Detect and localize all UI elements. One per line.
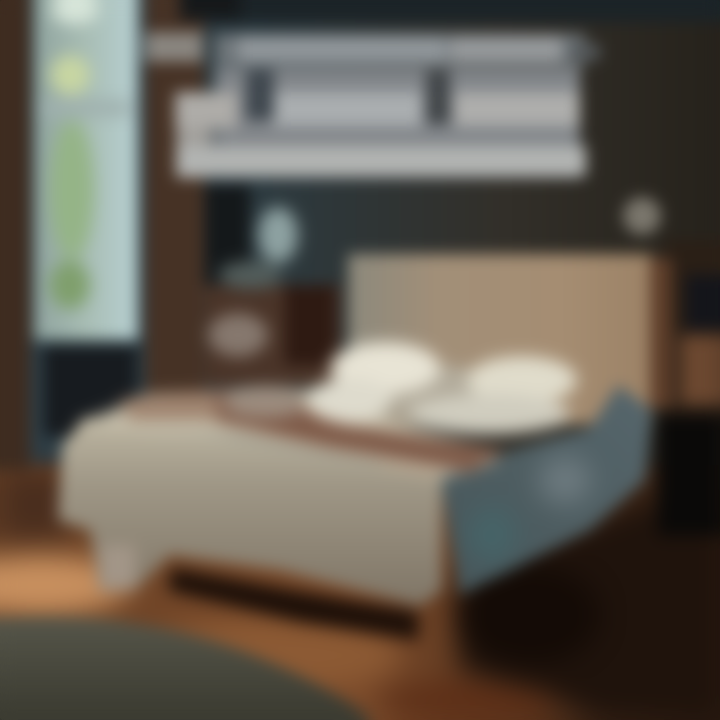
window sill shadow <box>44 346 136 436</box>
dark upper strip <box>180 0 720 22</box>
shelf with vase and nightstand <box>205 185 340 385</box>
title text block (illegible blurred lettering) <box>145 32 600 178</box>
pillows <box>308 342 577 434</box>
cream front face <box>58 418 442 606</box>
right side furniture <box>658 240 720 535</box>
bed top cover <box>75 390 500 478</box>
foreground rug <box>0 617 375 720</box>
left curtain <box>0 0 30 470</box>
bed leg <box>100 545 136 590</box>
window <box>34 0 138 340</box>
headboard <box>348 254 672 424</box>
grey side highlights <box>468 456 591 563</box>
wall lamp <box>623 197 661 235</box>
bed <box>58 254 672 640</box>
grey mattress side <box>440 385 652 595</box>
floor <box>0 465 720 720</box>
brown throw <box>120 386 505 472</box>
right curtain <box>146 0 204 395</box>
dark underside <box>168 568 418 640</box>
